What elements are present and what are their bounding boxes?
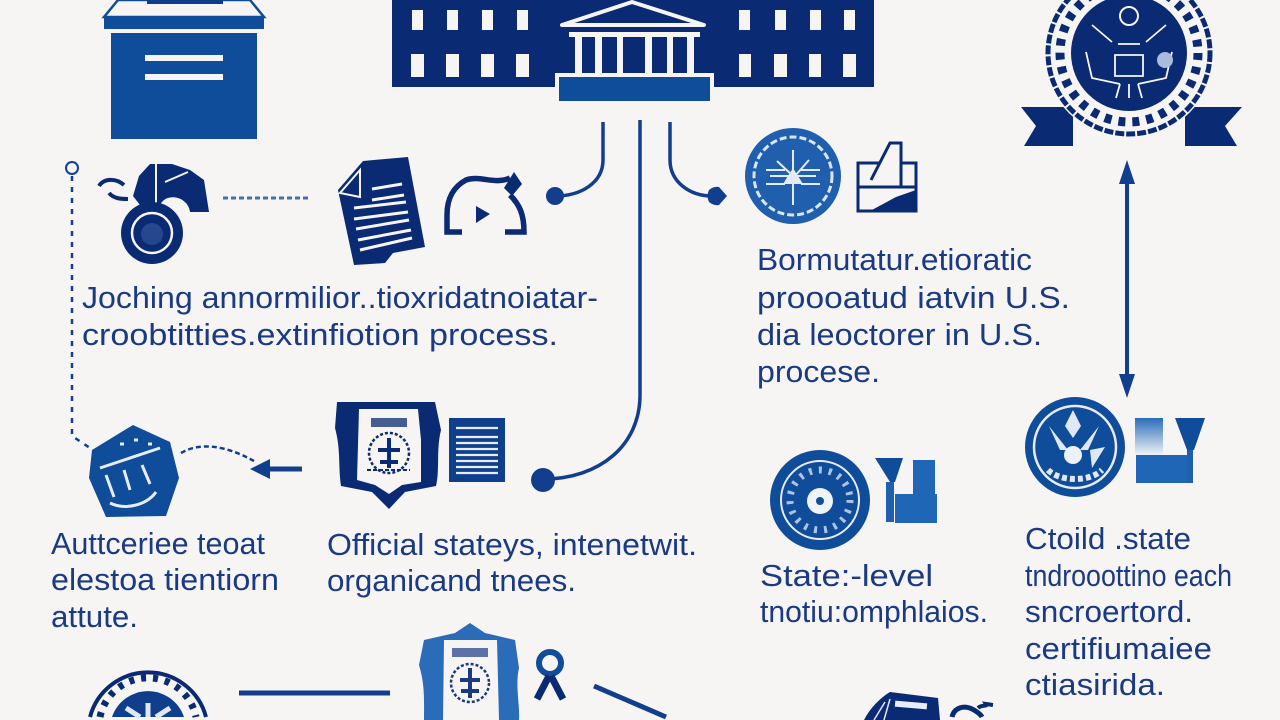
- icon: state ballot and torch: [875, 458, 937, 523]
- arrow: vertical double-headed: [1119, 160, 1135, 398]
- icon: small list document: [449, 418, 505, 482]
- icon: top-right seal with ribbon: [1021, 0, 1242, 146]
- icon: bottom seal: [90, 672, 206, 717]
- icon: right ballot and torch: [1135, 418, 1205, 483]
- icon: award ribbon: [537, 652, 563, 699]
- connector: bottom horizontal line: [239, 690, 390, 696]
- icon: ballot with hand: [858, 143, 916, 211]
- icon: ballot box: [104, 0, 264, 139]
- text: right description: [757, 242, 1070, 389]
- text: official description: [327, 527, 697, 598]
- connector: dashed line on left edge: [66, 162, 90, 448]
- connector: left curved line with dot: [546, 122, 603, 205]
- text: lower left description: Auttceriee teoat: [51, 526, 265, 561]
- arrow: pointing left: [250, 459, 302, 479]
- icon: bag outline: [447, 172, 524, 232]
- icon: hexagon badge: [89, 425, 179, 517]
- icon: state seal: [770, 450, 870, 550]
- icon: bottom loop: [952, 704, 993, 717]
- text: official description: organicand tnees.: [327, 563, 576, 598]
- text: official description: Official stateys, intenetwit.: [327, 527, 697, 562]
- connector: center line to lower dot: [531, 120, 640, 492]
- text: far right description: certifiumaiee: [1025, 631, 1212, 666]
- text: lower left description: [51, 526, 279, 634]
- text: state-level description: State:-level: [760, 558, 933, 593]
- text: left description: [82, 280, 598, 352]
- text: right description: procese.: [757, 354, 880, 389]
- icon: document page: [338, 157, 425, 265]
- text: far right description: tndrooottino each: [1025, 558, 1232, 593]
- text: left description: croobtitties.extinfiotion process.: [82, 317, 558, 352]
- text: state-level description: [760, 558, 988, 629]
- icon: blue seal: [745, 128, 841, 224]
- text: state-level description: tnotiu:omphlaios.: [760, 594, 988, 629]
- connector: bottom diagonal line: [594, 686, 666, 717]
- icon: dark shield: [335, 402, 441, 509]
- text: right description: proooatud iatvin U.S.: [757, 280, 1070, 315]
- text: lower left description: attute.: [51, 599, 138, 634]
- text: left description: Joching annormilior..tioxridatnoiatar-: [82, 280, 598, 315]
- text: far right description: ctiasirida.: [1025, 667, 1165, 702]
- text: far right description: Ctoild .state: [1025, 521, 1191, 556]
- icon: government building: [392, 0, 874, 105]
- icon: right seal: [1025, 397, 1125, 497]
- text: far right description: [1025, 521, 1232, 702]
- connector: right curved line with arrow head: [670, 122, 727, 205]
- text: right description: Bormutatur.etioratic: [757, 242, 1032, 277]
- text: right description: dia leoctorer in U.S.: [757, 317, 1042, 352]
- icon: light blue shield: [419, 623, 519, 720]
- connector: short dashed line: [223, 196, 310, 200]
- connector: dashed curve: [181, 446, 254, 461]
- text: lower left description: elestoa tientiorn: [51, 562, 279, 597]
- text: far right description: sncroertord.: [1025, 594, 1193, 629]
- icon: gear and tire emblem: [99, 164, 209, 264]
- icon: bottom book: [864, 692, 940, 720]
